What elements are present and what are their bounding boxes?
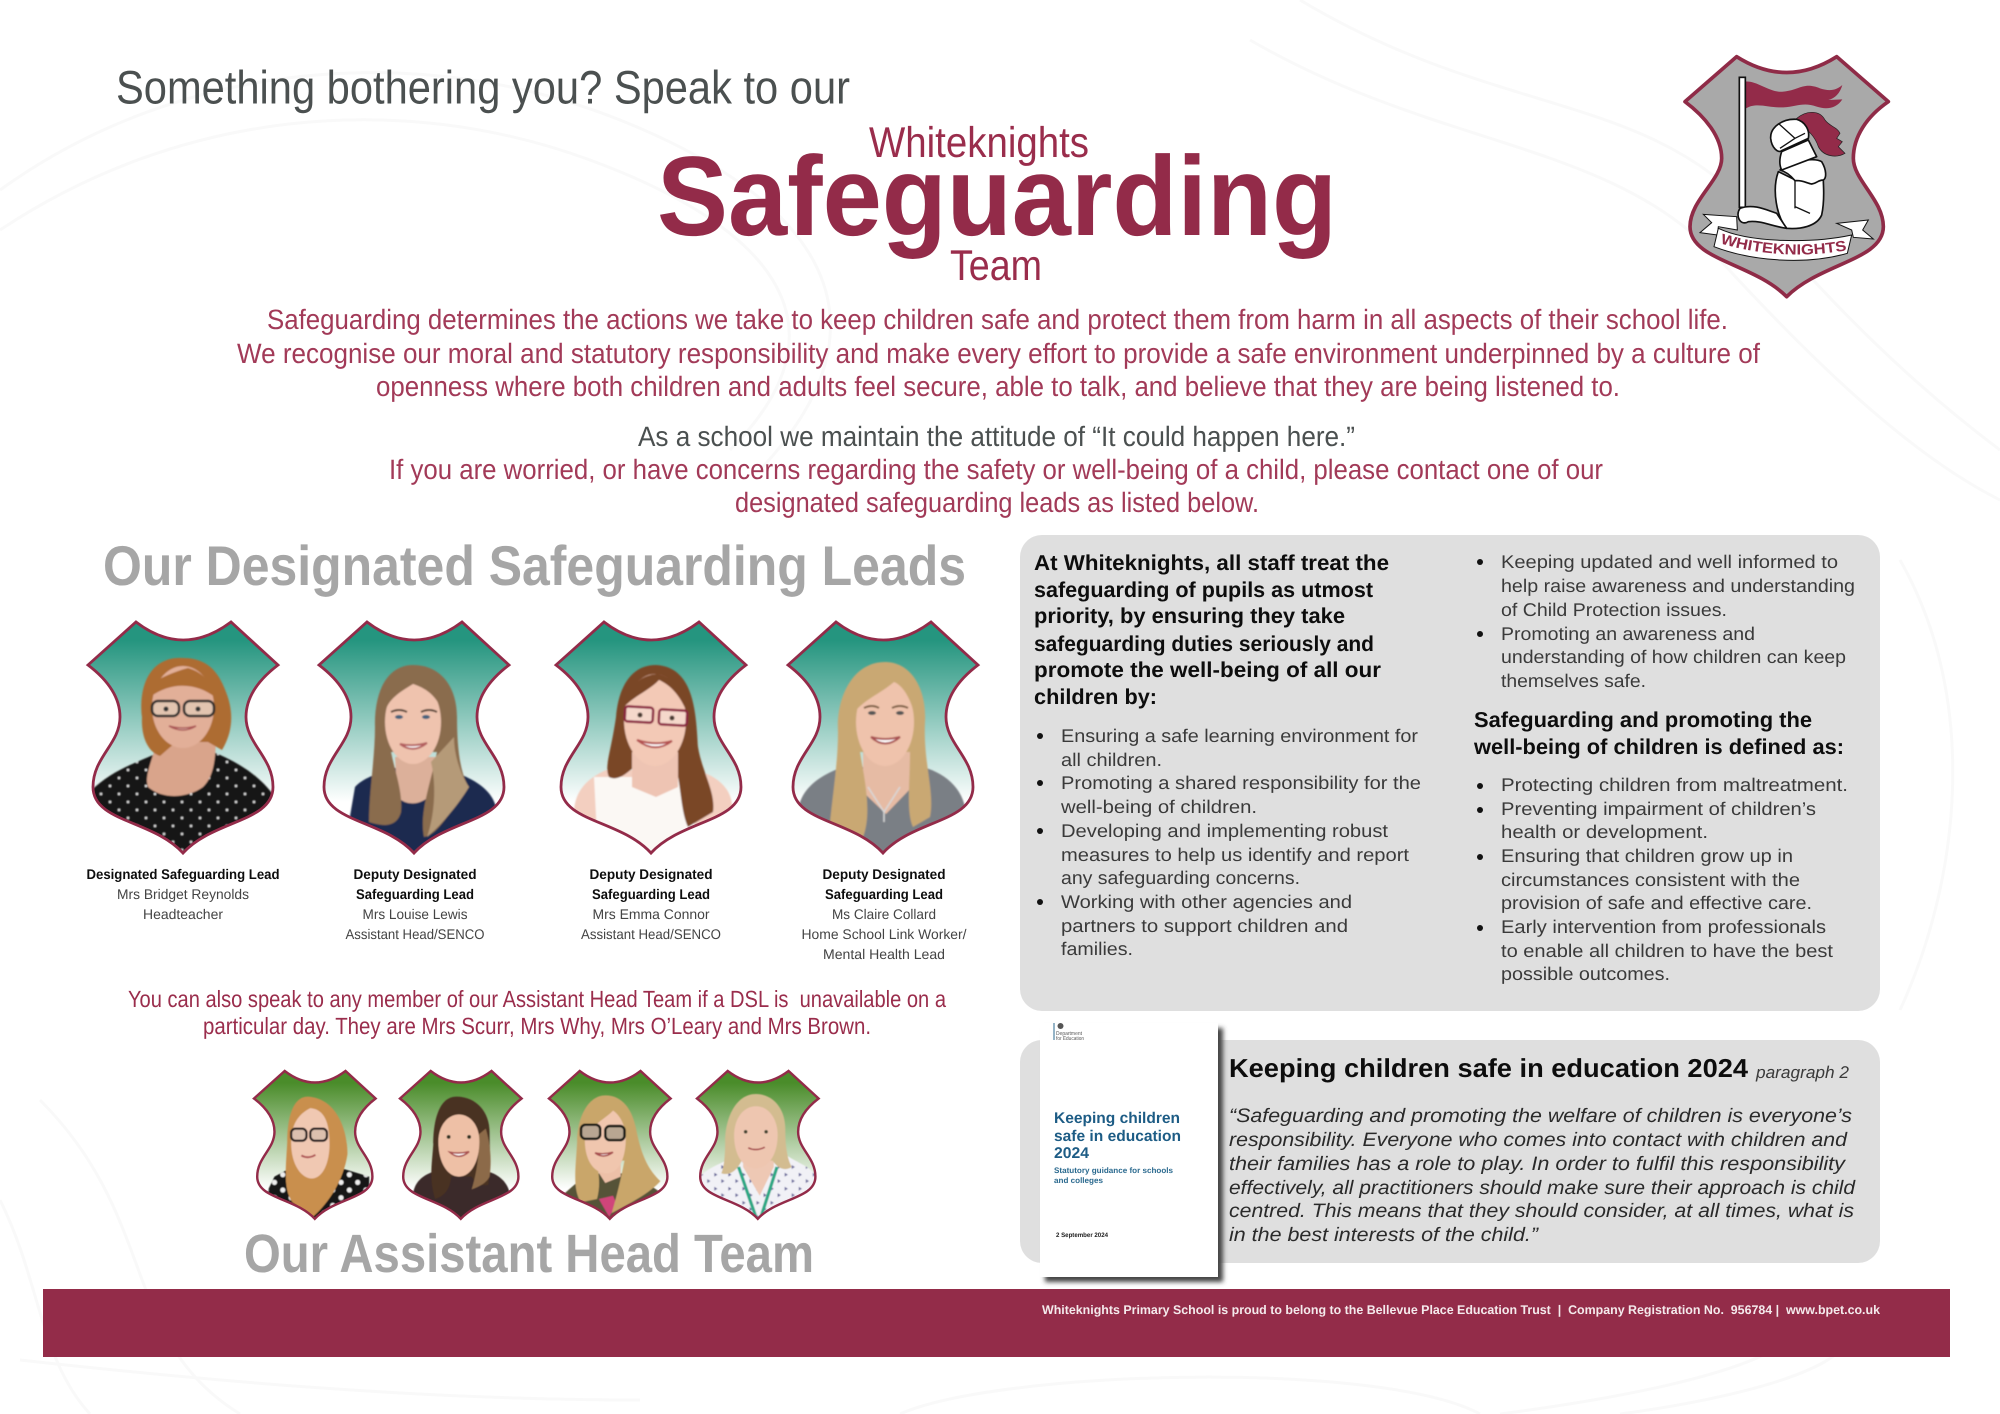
portrait: Mrs Brown <box>697 1071 819 1219</box>
intro paragraph: openness where both children and adults feel secure, able to talk, and believe that they are being listened to. <box>376 371 1620 402</box>
quote text: “Safeguarding and promoting the welfare of children is everyone’s <box>1229 1105 1852 1127</box>
title: Whiteknights Safeguarding Team: Safeguarding <box>657 133 1337 259</box>
left column bullet list: any safeguarding concerns. <box>1061 867 1300 888</box>
quote text: centred. This means that they should consider, at all times, what is <box>1229 1200 1854 1222</box>
quote text: in the best interests of the child.” <box>1229 1224 1540 1246</box>
left column bullet list: Working with other agencies and <box>1061 891 1352 912</box>
contact statement: designated safeguarding leads as listed below. <box>735 487 1259 518</box>
document cover: guidance booklet: Statutory guidance for schools <box>1054 1166 1174 1175</box>
caption: Mrs Bridget Reynolds: Designated Safeguarding Lead <box>86 866 280 882</box>
definition bullet list: Early intervention from professionals <box>1501 916 1826 937</box>
quote text <box>1229 1105 1856 1246</box>
caption: Mrs Louise Lewis: Deputy Designated <box>354 866 476 882</box>
portrait: Mrs Scurr <box>254 1071 376 1219</box>
intro paragraph: Safeguarding determines the actions we take to keep children safe and protect them from harm in all aspects of their school life. <box>267 304 1728 335</box>
document cover: guidance booklet: safe in education <box>1054 1128 1181 1145</box>
portrait: Mrs Louise Lewis <box>319 622 509 854</box>
caption: Mrs Emma Connor: Assistant Head/SENCO <box>581 926 721 942</box>
quote source note: paragraph 2 <box>1755 1063 1850 1082</box>
document cover: guidance booklet: 2 September 2024 <box>1056 1232 1108 1239</box>
right column bullet list <box>1477 551 1855 691</box>
caption: Ms Claire Collard: Safeguarding Lead <box>825 886 943 902</box>
icon: school crest <box>1683 54 1890 299</box>
definition bullet list: Ensuring that children grow up in <box>1501 845 1793 866</box>
right column bullet list: Keeping updated and well informed to <box>1501 551 1838 572</box>
left column heading: safeguarding of pupils as utmost <box>1034 578 1373 602</box>
left column bullet list: Ensuring a safe learning environment for <box>1061 725 1418 746</box>
caption: Mrs Louise Lewis: Safeguarding Lead <box>356 886 474 902</box>
document cover: guidance booklet: for Education <box>1056 1036 1084 1042</box>
right column bullet list: Promoting an awareness and <box>1501 623 1755 644</box>
caption: Mrs Louise Lewis: Mrs Louise Lewis <box>362 906 468 922</box>
left column bullet list: Developing and implementing robust <box>1061 820 1388 841</box>
document cover: guidance booklet: and colleges <box>1054 1176 1104 1185</box>
definition bullet list: circumstances consistent with the <box>1501 869 1800 890</box>
definition bullet list: Protecting children from maltreatment. <box>1501 774 1848 795</box>
left column bullet list <box>1037 725 1421 959</box>
caption: Ms Claire Collard: Home School Link Worker/ <box>802 926 967 942</box>
caption: Mrs Emma Connor: Deputy Designated <box>590 866 712 882</box>
left column bullet list: Promoting a shared responsibility for the <box>1061 772 1421 793</box>
callout: assistant head team note <box>128 986 947 1039</box>
portrait: Mrs Why <box>400 1071 522 1219</box>
quote text: responsibility. Everyone who comes into contact with children and <box>1229 1129 1848 1151</box>
left column heading: priority, by ensuring they take <box>1034 604 1345 628</box>
right column heading <box>1473 708 1844 759</box>
contact statement: If you are worried, or have concerns regarding the safety or well-being of a child, please contact one of our <box>389 454 1603 485</box>
right column bullet list: themselves safe. <box>1501 670 1646 691</box>
panel: staff commitments <box>1020 535 1880 1011</box>
definition bullet list: possible outcomes. <box>1501 963 1670 984</box>
left column heading: At Whiteknights, all staff treat the <box>1034 551 1389 575</box>
definition bullet list: Preventing impairment of children’s <box>1501 798 1816 819</box>
portrait: Ms Claire Collard <box>788 622 978 854</box>
callout: assistant head team note: You can also speak to any member of our Assistant Head Team if a DSL is unavailable on a <box>128 986 947 1012</box>
caption: Mrs Louise Lewis: Assistant Head/SENCO <box>346 926 485 942</box>
definition bullet list: health or development. <box>1501 821 1708 842</box>
portrait: Mrs Emma Connor <box>556 622 746 854</box>
quote heading: Keeping children safe in education 2024 <box>1229 1053 1749 1083</box>
callout: assistant head team note: particular day. They are Mrs Scurr, Mrs Why, Mrs O’Leary and Mrs Brown. <box>203 1013 871 1039</box>
caption: Mrs Emma Connor: Mrs Emma Connor <box>592 906 710 922</box>
caption: Ms Claire Collard: Mental Health Lead <box>823 946 945 962</box>
left column heading: safeguarding duties seriously and <box>1034 632 1374 656</box>
footer band <box>43 1289 1950 1357</box>
right column bullet list: of Child Protection issues. <box>1501 599 1727 620</box>
portrait: Mrs O'Leary <box>549 1071 671 1219</box>
document cover: guidance booklet <box>1040 1023 1223 1282</box>
right column heading: well-being of children is defined as: <box>1473 735 1844 759</box>
caption: Mrs Bridget Reynolds: Headteacher <box>143 906 223 922</box>
intro paragraph: We recognise our moral and statutory responsibility and make every effort to provide a safe environment underpinned by a culture of <box>237 338 1760 369</box>
definition bullet list <box>1477 774 1848 984</box>
caption: Ms Claire Collard: Ms Claire Collard <box>832 906 936 922</box>
left column bullet list: measures to help us identify and report <box>1061 844 1409 865</box>
title: Whiteknights Safeguarding Team: Team <box>950 242 1042 290</box>
right column bullet list: help raise awareness and understanding <box>1501 575 1855 596</box>
quote text: their families has a role to play. In order to fulfil this responsibility <box>1229 1153 1846 1175</box>
caption: Ms Claire Collard: Deputy Designated <box>822 866 946 882</box>
caption: Ms Claire Collard <box>802 866 967 962</box>
header: intro line: Something bothering you? Speak to our <box>116 60 850 114</box>
intro paragraph <box>237 304 1760 402</box>
caption: Mrs Bridget Reynolds: Mrs Bridget Reynolds <box>117 886 249 902</box>
title: Whiteknights Safeguarding Team: Whiteknights <box>869 119 1089 167</box>
document cover: guidance booklet: 2024 <box>1054 1145 1089 1162</box>
document cover: guidance booklet: Keeping children <box>1054 1110 1180 1127</box>
contact statement <box>389 421 1603 518</box>
right column bullet list: understanding of how children can keep <box>1501 646 1846 667</box>
footer band: Whiteknights Primary School is proud to belong to the Bellevue Place Education Trust | Company Registration No. 956784 | www.bpet.co.uk <box>1042 1303 1880 1317</box>
document cover: guidance booklet: Department <box>1056 1031 1082 1037</box>
caption: Mrs Bridget Reynolds <box>86 866 280 922</box>
definition bullet list: to enable all children to have the best <box>1501 940 1833 961</box>
panel: Keeping children safe quote <box>1020 1040 1880 1263</box>
left column heading: children by: <box>1034 685 1157 709</box>
icon: school crest: WHITEKNIGHTS <box>1722 234 1846 254</box>
caption: Mrs Emma Connor <box>581 866 721 942</box>
quote text: effectively, all practitioners should make sure their approach is child <box>1229 1177 1856 1199</box>
contact statement: As a school we maintain the attitude of “It could happen here.” <box>638 421 1355 452</box>
left column bullet list: well-being of children. <box>1060 796 1257 817</box>
right column heading: Safeguarding and promoting the <box>1474 708 1812 732</box>
definition bullet list: provision of safe and effective care. <box>1501 892 1812 913</box>
left column heading: promote the well-being of all our <box>1034 658 1382 682</box>
left column heading <box>1034 551 1389 709</box>
portrait: Mrs Bridget Reynolds <box>88 622 278 854</box>
left column bullet list: all children. <box>1061 749 1162 770</box>
left column bullet list: families. <box>1061 938 1133 959</box>
left column bullet list: partners to support children and <box>1061 915 1348 936</box>
caption: Mrs Louise Lewis <box>346 866 485 942</box>
heading: assistant head team: Our Assistant Head Team <box>244 1224 814 1284</box>
caption: Mrs Emma Connor: Safeguarding Lead <box>592 886 710 902</box>
heading: designated leads: Our Designated Safeguarding Leads <box>103 534 966 597</box>
